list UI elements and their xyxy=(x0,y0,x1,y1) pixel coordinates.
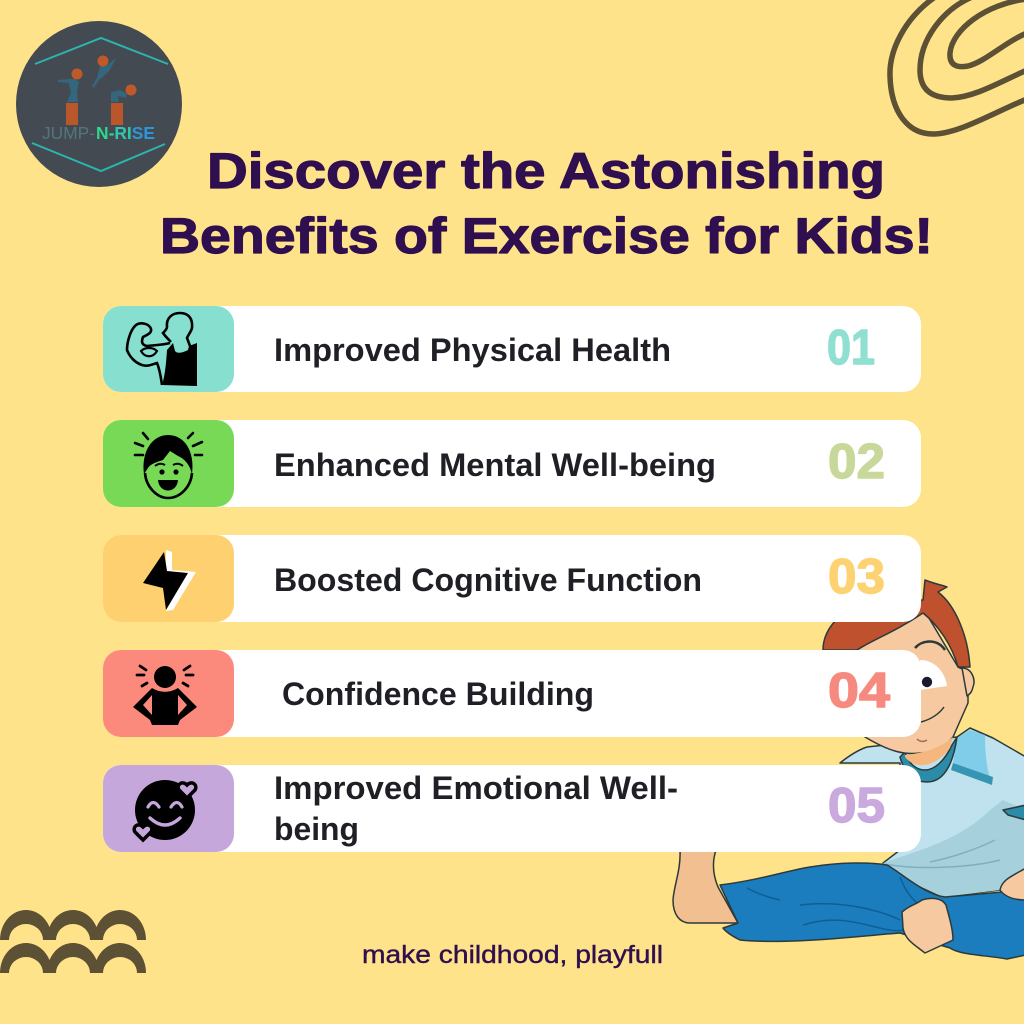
boy hair xyxy=(823,580,970,667)
card 5: Improved Emotional Well-being xyxy=(103,765,921,852)
number 01: 01 xyxy=(827,321,875,375)
footer tagline: make childhood, playfull xyxy=(362,941,663,969)
title: Benefits of Exercise for Kids! xyxy=(160,208,933,264)
card 3: Boosted Cognitive Function xyxy=(103,535,921,622)
number 05: 05 xyxy=(828,779,885,833)
boy collar xyxy=(900,737,957,782)
illustration: boy stretching xyxy=(673,580,1024,959)
boy shirt xyxy=(840,728,1024,897)
icon: confident person xyxy=(133,666,197,725)
boy left foot xyxy=(673,850,738,923)
number 04: 04 xyxy=(828,664,890,718)
label 5 xyxy=(274,770,678,847)
card 4: Confidence Building xyxy=(103,650,921,737)
card 1: Improved Physical Health xyxy=(103,306,921,392)
number 03: 03 xyxy=(828,550,885,604)
decorative arches bottom left xyxy=(0,910,146,973)
title xyxy=(160,143,933,264)
icon: smiling face with hearts xyxy=(134,780,196,840)
logo wordmark xyxy=(42,123,155,143)
logo: Jump-N-Rise badge xyxy=(16,21,182,187)
title: Discover the Astonishing xyxy=(207,143,885,199)
decorative swirl top right xyxy=(890,0,1024,134)
label 5: Improved Emotional Well- xyxy=(274,770,678,806)
label 4: Confidence Building xyxy=(282,676,594,712)
card 2: Enhanced Mental Well-being xyxy=(103,420,921,507)
label 1: Improved Physical Health xyxy=(274,332,671,368)
boy trousers xyxy=(720,863,1024,959)
logo wordmark: N-RISE xyxy=(96,123,155,143)
icon: flexing muscle man xyxy=(127,313,197,386)
label 3: Boosted Cognitive Function xyxy=(274,562,702,598)
icon: lightning bolt xyxy=(143,550,196,611)
boy eye and mouth xyxy=(915,642,947,741)
boy right foot xyxy=(902,898,953,953)
label 2: Enhanced Mental Well-being xyxy=(274,447,716,483)
number 02: 02 xyxy=(828,435,885,489)
boy hand xyxy=(1000,868,1024,900)
logo figures xyxy=(58,56,136,102)
icon: happy face xyxy=(135,433,202,498)
logo pillars xyxy=(66,103,123,125)
boy head xyxy=(850,608,968,754)
logo wordmark: JUMP- xyxy=(42,123,95,143)
label 5: being xyxy=(274,811,359,847)
